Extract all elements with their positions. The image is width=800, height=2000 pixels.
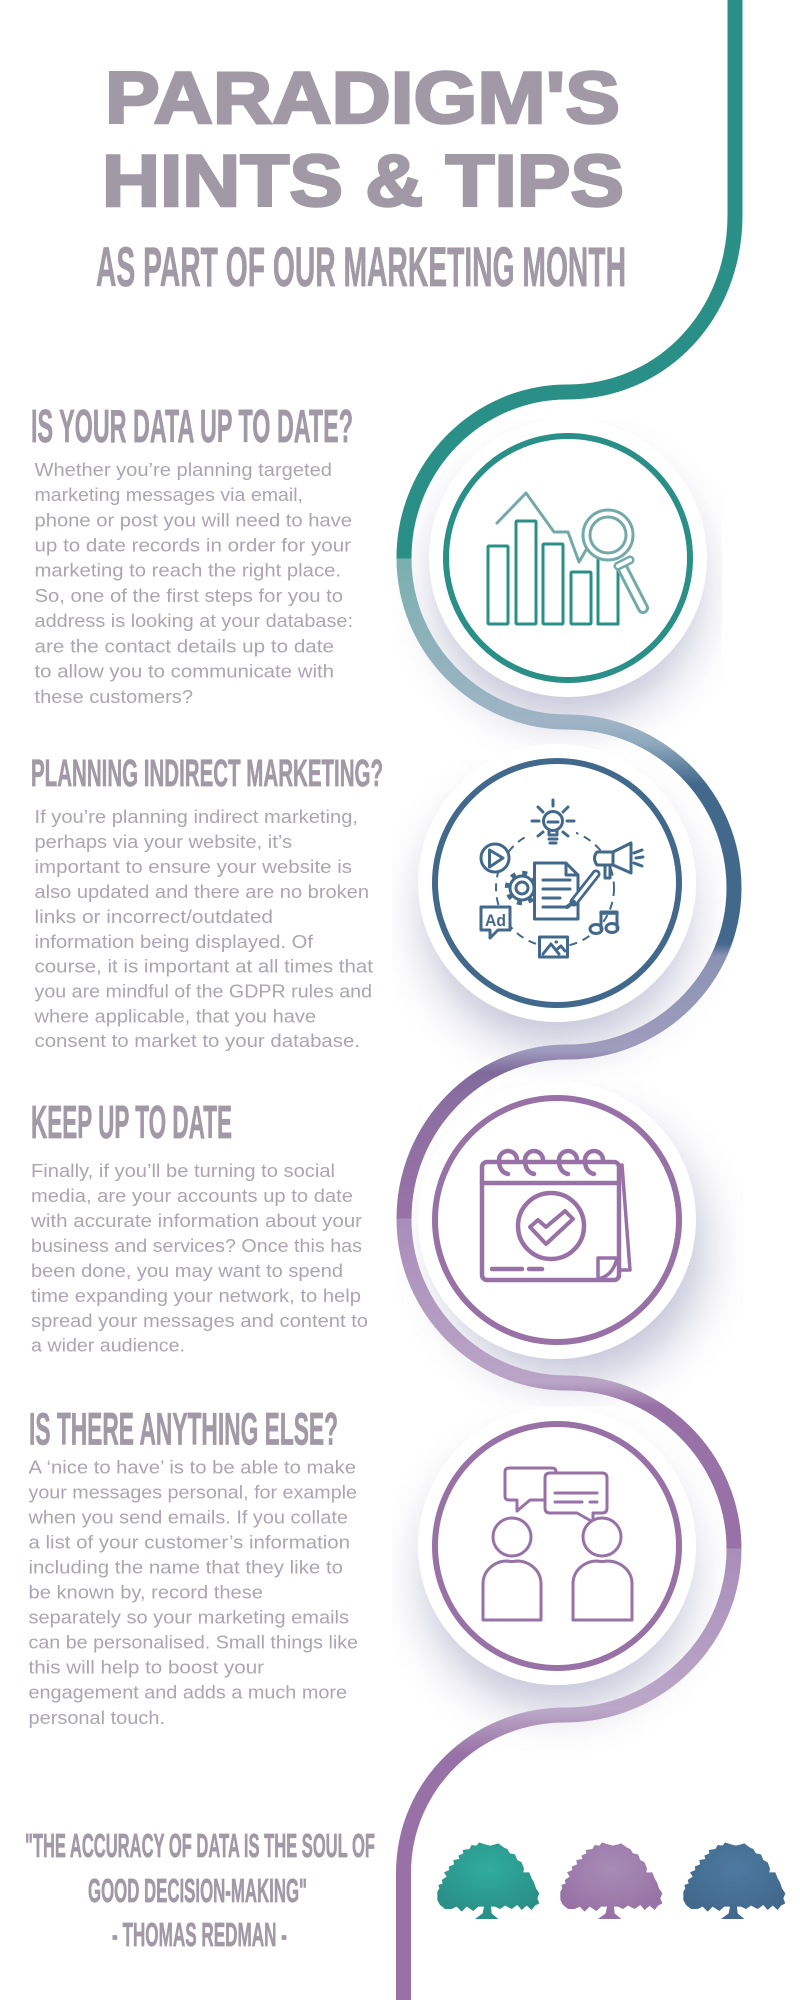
- panel: data circle: [429, 419, 707, 697]
- body text: section one: marketing to reach the right place.: [34, 560, 341, 580]
- panel: conversation circle: [418, 1407, 696, 1685]
- panel: section three text: KEEP UP TO DATE: [31, 1096, 232, 1148]
- body text: section two: where applicable, that you have: [33, 1006, 316, 1026]
- white disc with purple ring: [418, 1407, 696, 1685]
- white disc with purple ring: [418, 1081, 696, 1359]
- panel: marketing circle: [418, 744, 696, 1022]
- body text: section four: separately so your marketing emails: [28, 1608, 349, 1628]
- white disc with teal ring: [429, 419, 707, 697]
- body text: section one: to allow you to communicate with: [34, 662, 334, 682]
- body text: section one: phone or post you will need to have: [34, 510, 352, 530]
- icon: marketing cycle: [481, 800, 643, 957]
- winding track: [404, 0, 735, 2000]
- body text: section two: perhaps via your website, it’s: [34, 832, 292, 852]
- body text: section one: Whether you’re planning targeted: [34, 460, 332, 480]
- body text: section three: with accurate information about your: [30, 1211, 362, 1231]
- body text: section four: this will help to boost your: [28, 1658, 264, 1678]
- body text: section four: a list of your customer’s information: [28, 1532, 350, 1552]
- body text: section two: [33, 807, 373, 1051]
- body text: section three: media, are your accounts up to date: [31, 1186, 353, 1206]
- body text: section two: If you’re planning indirect marketing,: [34, 807, 358, 827]
- body text: section four: engagement and adds a much more: [28, 1682, 347, 1702]
- body text: section one: are the contact details up to date: [34, 636, 334, 656]
- body text: section two: also updated and there are no broken: [34, 882, 369, 902]
- icon: calendar with check: [482, 1151, 630, 1280]
- body text: section four: including the name that they like to: [28, 1558, 343, 1578]
- body text: section one: So, one of the first steps for you to: [34, 586, 343, 606]
- title: HINTS & TIPS: [102, 141, 624, 222]
- icon label: Ad: Ad: [485, 911, 506, 930]
- heading: is your data up to date: IS YOUR DATA UP TO DATE?: [31, 400, 353, 452]
- icon: purple tree: [560, 1842, 662, 1919]
- circle drop shadows: [425, 456, 704, 1708]
- body text: section three: business and services? Once this has: [31, 1236, 362, 1256]
- body text: section one: up to date records in order for your: [34, 536, 351, 556]
- body text: section one: address is looking at your database:: [34, 611, 353, 631]
- body text: section two: course, it is important at all times that: [34, 956, 373, 976]
- title: PARADIGM'S: [105, 58, 620, 139]
- body text: section three: been done, you may want to spend: [31, 1261, 343, 1281]
- body text: section three: time expanding your network, to help: [31, 1286, 361, 1306]
- body text: section two: information being displayed. Of: [34, 932, 314, 952]
- body text: section one: marketing messages via email,: [34, 485, 303, 505]
- body text: section three: [30, 1161, 368, 1356]
- panel: section three text: [30, 1096, 368, 1356]
- body text: section two: important to ensure your website is: [34, 857, 352, 877]
- heading: planning indirect marketing: PLANNING INDIRECT MARKETING?: [31, 753, 383, 795]
- icon: blue tree: [683, 1842, 785, 1919]
- body text: section two: consent to market to your database.: [34, 1031, 360, 1051]
- body text: section two: you are mindful of the GDPR rules and: [34, 982, 372, 1002]
- body text: section four: be known by, record these: [28, 1582, 263, 1602]
- body text: section four: [27, 1458, 358, 1728]
- panel: section two text: [31, 753, 383, 1051]
- heading: is there anything else: IS THERE ANYTHING ELSE?: [29, 1404, 338, 1454]
- panel: section four text: [27, 1404, 358, 1728]
- body text: section four: personal touch.: [28, 1708, 165, 1728]
- icon: two people talking: [483, 1468, 632, 1620]
- body text: section three: a wider audience.: [31, 1336, 185, 1356]
- body text: section three: Finally, if you’ll be turning to social: [31, 1161, 335, 1181]
- body text: section two: links or incorrect/outdated: [34, 907, 273, 927]
- title: [102, 58, 624, 222]
- panel: calendar circle: [418, 1081, 696, 1359]
- body text: section four: when you send emails. If you collate: [27, 1508, 348, 1528]
- panel: section one text: [31, 400, 353, 707]
- quote: GOOD DECISION-MAKING": [88, 1872, 307, 1909]
- icon: bar chart with magnifier: [488, 493, 643, 624]
- quote: [25, 1827, 375, 1953]
- quote: - THOMAS REDMAN -: [112, 1916, 287, 1953]
- body text: section four: your messages personal, for example: [28, 1482, 357, 1502]
- quote: "THE ACCURACY OF DATA IS THE SOUL OF: [25, 1827, 375, 1864]
- body text: section four: can be personalised. Small things like: [28, 1632, 358, 1652]
- body text: section one: [34, 460, 353, 707]
- body text: section one: these customers?: [34, 687, 193, 707]
- body text: section three: spread your messages and content to: [31, 1311, 368, 1331]
- body text: section four: A ‘nice to have’ is to be able to make: [28, 1458, 356, 1478]
- white disc with blue ring: [418, 744, 696, 1022]
- icon: teal tree: [437, 1842, 539, 1919]
